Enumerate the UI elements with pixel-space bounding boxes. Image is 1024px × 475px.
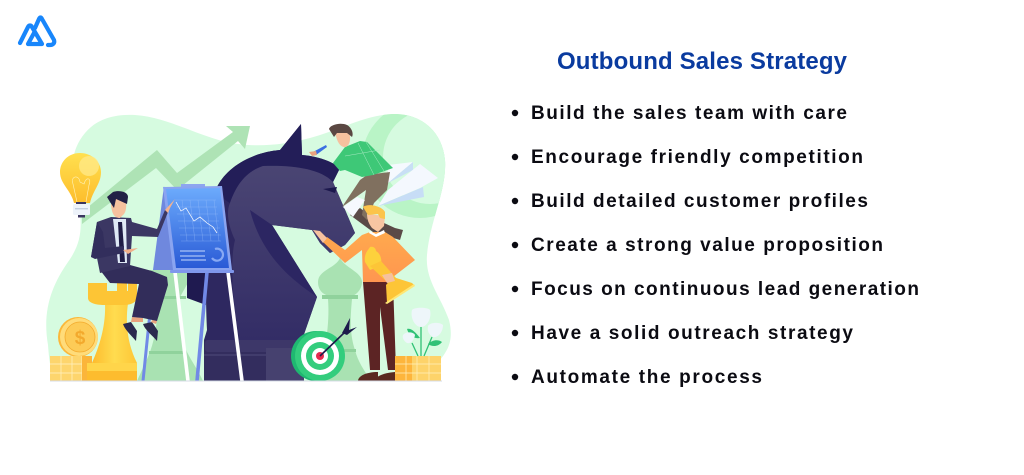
target with dart: [291, 318, 357, 381]
paper plane: [378, 162, 438, 206]
list item 3: Build detailed customer profiles: [531, 191, 868, 212]
man in green shirt: [309, 124, 403, 240]
list item 6: Have a solid outreach strategy: [531, 323, 853, 344]
coin and coin stack left: [50, 317, 98, 381]
list item 2: Encourage friendly competition: [531, 147, 863, 168]
logo: [20, 18, 54, 45]
knight chess piece: [187, 124, 355, 381]
ground line: [50, 380, 442, 382]
shoes: [123, 322, 137, 341]
list item 1: Build the sales team with care: [531, 103, 847, 124]
coin stack and flowers right: [395, 308, 443, 381]
trousers: [100, 262, 168, 321]
man in orange sweater: [313, 205, 415, 381]
green pawn: [137, 270, 203, 381]
list item 7: Automate the process: [531, 367, 762, 388]
flip chart: [143, 184, 242, 381]
list item 5: Focus on continuous lead generation: [531, 279, 919, 300]
bishop: [318, 258, 371, 381]
growth arrow: [82, 126, 250, 224]
rook: [87, 283, 137, 381]
background blob: [46, 114, 451, 380]
coin and coin stack left: $: [75, 328, 86, 349]
illustration: outbound sales chess scene: [46, 114, 451, 382]
list item 4: Create a strong value proposition: [531, 235, 883, 256]
bullet list: [512, 103, 919, 388]
businessman in suit: [91, 191, 175, 341]
lightbulb: [60, 153, 101, 218]
jacket: [91, 210, 168, 273]
title: Outbound Sales Strategy: [557, 48, 848, 75]
trophy pawn: [365, 247, 415, 304]
